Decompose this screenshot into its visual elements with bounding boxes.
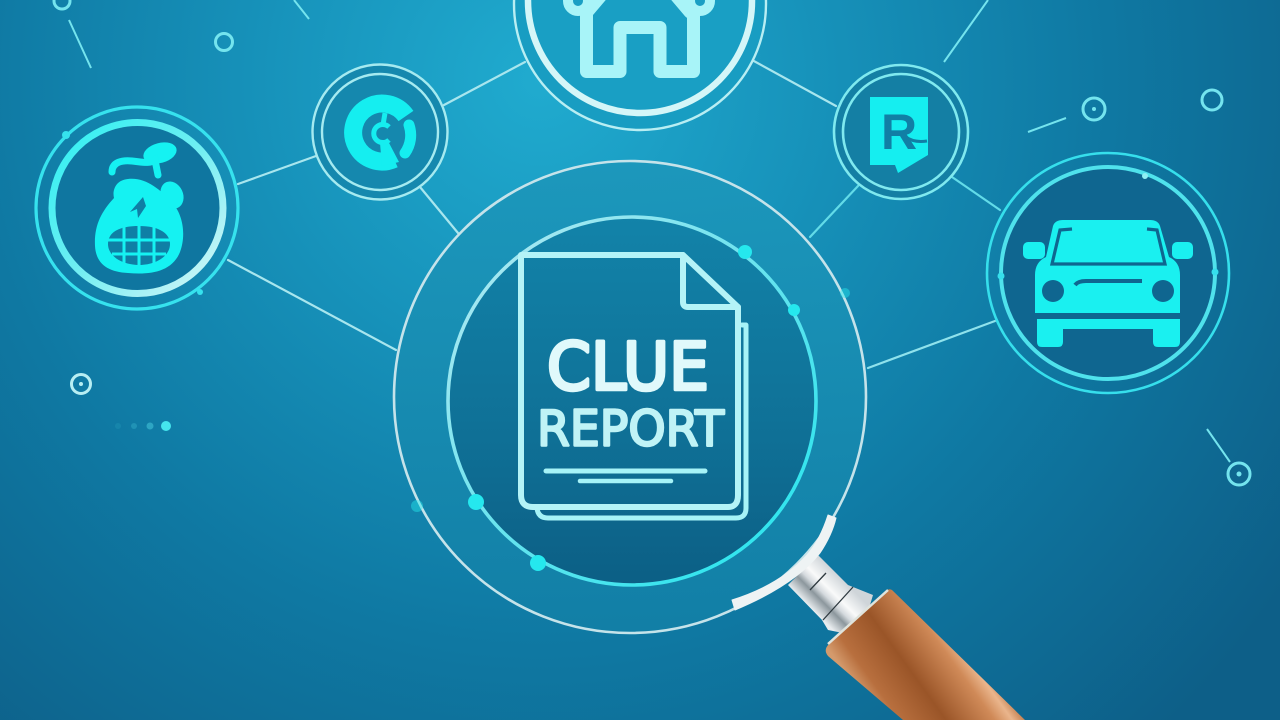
panel: coin node <box>312 64 448 200</box>
panel: car node <box>987 153 1229 393</box>
wooden grip <box>826 589 1025 720</box>
lens nodes <box>411 245 850 571</box>
panel: R document node <box>834 65 968 199</box>
icon: car <box>1023 220 1193 347</box>
icon: R document tag: R <box>881 104 917 160</box>
panel: house node <box>514 0 766 130</box>
document icon <box>521 255 746 518</box>
ferrule <box>788 555 873 633</box>
connector lines <box>228 60 1000 368</box>
title: REPORT: REPORT <box>537 400 725 458</box>
icon: house <box>568 0 710 72</box>
lens <box>394 161 866 633</box>
lens collar <box>732 515 836 610</box>
panel: bag and globe node <box>36 107 238 309</box>
icon: circular coin arrow <box>353 104 411 166</box>
decorative nodes <box>54 0 1250 485</box>
title: CLUE: CLUE <box>547 328 709 406</box>
icon: money bag with globe <box>95 139 188 274</box>
magnifying glass handle <box>788 555 1025 720</box>
